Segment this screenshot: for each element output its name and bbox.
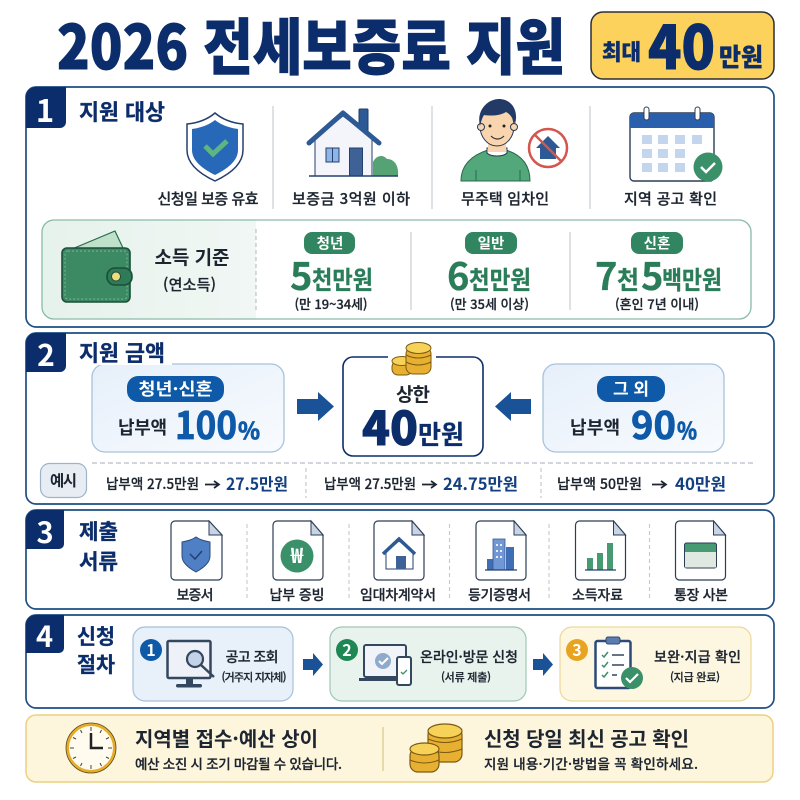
arrow step 1 to 2	[303, 653, 323, 676]
step 1	[133, 627, 293, 701]
section number 4: 4	[36, 614, 53, 656]
text: check latest notice: 지원 내용·기간·방법을 꼭 확인하세요.	[484, 753, 698, 773]
box: cap 400 thousand won	[343, 338, 483, 459]
section number 2: 2	[37, 331, 55, 375]
panel 4: application steps	[26, 614, 774, 708]
income criteria box	[42, 220, 751, 319]
arrow step 2 to 3	[533, 653, 553, 676]
title: 2026 전세보증료 지원	[57, 0, 565, 87]
heading: support amount: 지원 금액	[79, 336, 165, 368]
step 2: (서류 제출)	[441, 669, 491, 685]
document: payment proof: ₩	[290, 540, 304, 570]
example 3	[557, 471, 726, 495]
label: deposit under 300M: 보증금 3억원 이하	[292, 188, 410, 209]
step 2	[330, 627, 526, 701]
document: payment proof	[273, 521, 323, 580]
badge: up to 400 thousand won	[591, 0, 774, 87]
label: lease contract: 임대차계약서	[360, 585, 436, 605]
heading: procedure	[77, 621, 115, 679]
tier: general: (만 35세 이상)	[450, 294, 529, 313]
label: no-home tenant: 무주택 임차인	[461, 188, 549, 209]
document: income data	[576, 521, 626, 580]
box: others 90%	[543, 364, 724, 452]
tier: newlywed: 백만원	[662, 261, 722, 297]
tier: general: 6	[447, 246, 469, 301]
badge: up to 400 thousand won: 최대	[602, 35, 641, 67]
example 1: 납부액 27.5만원	[106, 474, 199, 494]
tier: newlywed	[595, 232, 722, 313]
tier: newlywed: 천	[617, 261, 639, 297]
icon: coin stacks	[410, 724, 462, 772]
tier: general: 천만원	[469, 261, 531, 297]
text: check latest notice: 신청 당일 최신 공고 확인	[484, 723, 689, 752]
badge: up to 400 thousand won: 40	[648, 0, 715, 87]
heading: documents: 제출	[79, 516, 118, 546]
icon: person with no-house sign	[461, 99, 567, 181]
text: check latest notice	[484, 723, 698, 773]
panel 2: support amount	[26, 331, 774, 504]
section number 1	[26, 86, 66, 131]
section number 1: 1	[36, 86, 54, 131]
box: cap 400 thousand won: 40	[362, 393, 418, 459]
icon: coins on cap box	[388, 338, 436, 375]
box: others 90%: 90	[631, 395, 676, 450]
step 3: 3	[572, 637, 582, 661]
document: guarantee	[171, 521, 222, 580]
text: regional difference	[135, 723, 342, 773]
icon: calendar	[630, 107, 722, 182]
heading: eligibility: 지원 대상	[79, 95, 165, 127]
example 2: 납부액 27.5만원	[324, 474, 416, 494]
section number 4	[26, 614, 64, 656]
text: regional difference: 지역별 접수·예산 상이	[135, 723, 318, 752]
box: youth and newlywed 100%: 100	[175, 395, 237, 450]
icon: clock	[66, 723, 116, 773]
box: cap 400 thousand won: 만원	[418, 415, 464, 452]
tier: youth: (만 19~34세)	[294, 294, 368, 313]
tier: youth: 천만원	[312, 261, 373, 297]
label: bankbook copy: 통장 사본	[674, 585, 728, 605]
box: others 90%: 납부액	[570, 414, 620, 440]
label: payment proof: 납부 증빙	[270, 585, 324, 605]
box: youth and newlywed 100%: 납부액	[118, 414, 167, 440]
document: bankbook copy	[676, 521, 726, 580]
example tag	[40, 464, 86, 498]
label: registry: 등기증명서	[468, 585, 531, 605]
arrow right	[297, 392, 334, 421]
step 1: 1	[146, 637, 156, 661]
label: guarantee valid: 신청일 보증 유효	[158, 188, 259, 209]
heading: procedure: 신청	[77, 621, 115, 651]
tier: youth: 청년	[317, 232, 343, 254]
heading: documents	[79, 516, 118, 576]
section number 3: 3	[36, 510, 54, 552]
tier: youth	[290, 232, 373, 313]
icon: laptop and phone	[359, 645, 411, 685]
box: youth and newlywed 100%: 청년·신혼	[138, 375, 212, 400]
text: income criteria: 소득 기준	[154, 243, 230, 270]
example tag: 예시	[50, 469, 77, 491]
label: check local notice: 지역 공고 확인	[624, 188, 717, 209]
tier: general: 일반	[478, 232, 504, 254]
step 1: (거주지 지자체)	[222, 669, 286, 685]
icon: wallet	[62, 231, 132, 302]
box: youth and newlywed 100%: %	[238, 412, 260, 446]
icon: shield	[187, 113, 243, 181]
step 2: 2	[342, 637, 352, 661]
step 1: 공고 조회	[226, 647, 278, 667]
document: lease contract	[374, 521, 424, 580]
heading: procedure: 절차	[77, 649, 115, 679]
tier: newlywed: 7	[595, 246, 617, 301]
label: guarantee: 보증서	[176, 585, 214, 605]
example 2	[324, 471, 518, 495]
icon: clipboard with check	[596, 637, 643, 689]
document: registry	[476, 521, 526, 580]
box: others 90%: 그 외	[613, 375, 649, 400]
step 3: 보완·지급 확인	[654, 647, 741, 667]
badge: up to 400 thousand won: 만원	[719, 38, 763, 74]
arrow left	[495, 392, 531, 421]
section number 3	[26, 510, 64, 552]
panel 3: required documents	[26, 510, 774, 609]
example 3: 납부액 50만원	[557, 474, 642, 494]
icon: monitor with magnifier	[168, 641, 214, 688]
box: cap 400 thousand won: 상한	[396, 380, 430, 407]
panel 1: eligibility	[26, 86, 774, 327]
example 1: 27.5만원	[226, 471, 288, 495]
label: income data: 소득자료	[572, 585, 623, 605]
example 1	[106, 471, 288, 495]
panel: notice footer	[26, 715, 773, 782]
step 2: 온라인·방문 신청	[420, 647, 518, 667]
box: others 90%: %	[677, 412, 697, 446]
tier: newlywed: 신혼	[644, 232, 670, 254]
step 3	[560, 627, 751, 701]
section number 2	[26, 331, 66, 375]
box: youth and newlywed 100%	[92, 364, 284, 452]
heading: documents: 서류	[79, 546, 118, 576]
example 3: 40만원	[675, 471, 726, 495]
tier: newlywed: (혼인 7년 이내)	[615, 294, 699, 313]
text: annual income: (연소득)	[163, 274, 216, 295]
tier: general	[447, 232, 531, 313]
text: regional difference: 예산 소진 시 조기 마감될 수 있습니다.	[135, 753, 342, 773]
example 2: 24.75만원	[443, 471, 518, 495]
tier: youth: 5	[290, 246, 312, 301]
tier: newlywed: 5	[641, 246, 663, 301]
icon: house	[309, 109, 398, 176]
step 3: (지급 완료)	[670, 669, 720, 685]
